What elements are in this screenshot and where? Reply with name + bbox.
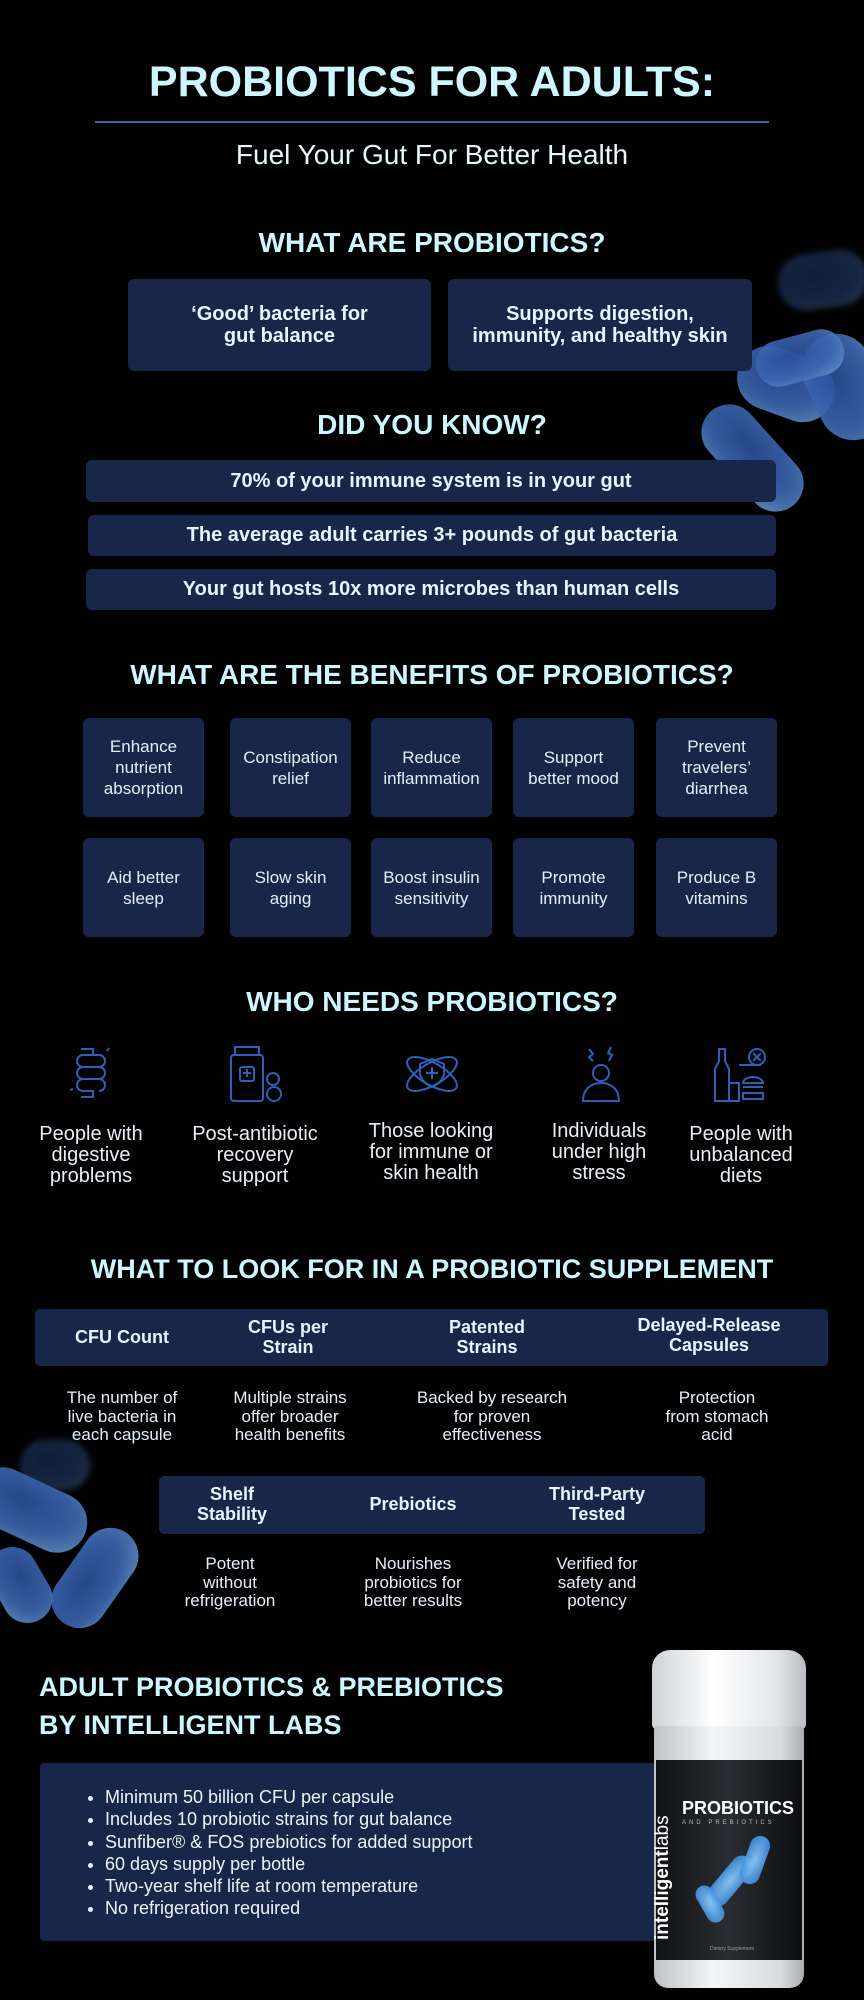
panel: benefits grid: sensitivity — [395, 888, 468, 908]
panel: definition boxes — [128, 279, 752, 371]
fact 3 — [86, 569, 776, 610]
panel: criteria row 1: Protection — [679, 1388, 755, 1407]
subtitle: Fuel Your Gut For Better Health — [236, 139, 628, 170]
panel: criteria row 1: Patented — [449, 1317, 525, 1337]
panel: benefits grid: Support — [544, 748, 603, 766]
panel: criteria row 2: Nourishes — [375, 1554, 451, 1573]
panel: benefits grid: Enhance — [110, 737, 177, 756]
icon: immune shield atom — [406, 1056, 458, 1092]
panel: benefits grid: vitamins — [685, 888, 748, 908]
panel: benefits grid: nutrient — [115, 758, 172, 777]
panel: who needs icons: unbalanced — [689, 1144, 793, 1166]
panel: criteria row 1: offer broader — [241, 1406, 339, 1426]
panel: benefits grid: better mood — [528, 768, 619, 788]
panel: benefits grid: travelers’ — [682, 758, 751, 777]
fact 1: 70% of your immune system is in your gut — [230, 470, 632, 492]
panel: product features: No refrigeration required — [105, 1898, 300, 1918]
panel: product features: Sunfiber® & FOS prebiotics for added support — [105, 1832, 472, 1852]
panel: criteria row 2: Third-Party — [549, 1484, 645, 1504]
panel: who needs icons: Those looking — [369, 1120, 493, 1142]
product bottle: Dietary Supplement — [710, 1946, 754, 1952]
text: digestive: problems — [50, 1165, 132, 1187]
panel: who needs icons: for immune or — [369, 1141, 493, 1163]
icon: intestine — [70, 1048, 110, 1098]
text: digestive: digestive — [52, 1144, 130, 1166]
panel: criteria row 2: Shelf — [210, 1484, 254, 1504]
panel: who needs icons: recovery — [217, 1144, 293, 1166]
fact 3: Your gut hosts 10x more microbes than human cells — [183, 578, 679, 600]
panel: criteria row 2: potency — [567, 1591, 627, 1610]
panel: criteria row 2: better results — [364, 1591, 462, 1610]
product bottle — [652, 1650, 806, 1988]
panel: product features: Two-year shelf life at room temperature — [105, 1876, 418, 1896]
panel: who needs icons: diets — [720, 1165, 762, 1187]
panel: who needs icons: stress — [572, 1162, 626, 1184]
panel: criteria row 2: refrigeration — [185, 1591, 275, 1610]
panel: benefits grid: Produce B — [677, 868, 756, 886]
panel: criteria row 1: from stomach — [666, 1406, 768, 1426]
panel: criteria row 2: Verified for — [556, 1554, 638, 1573]
text: digestive — [39, 1123, 143, 1187]
panel: criteria row 2: safety and — [558, 1572, 636, 1592]
panel: product features: Includes 10 probiotic strains for gut balance — [105, 1809, 452, 1829]
heading: did you know: DID YOU KNOW? — [317, 409, 547, 440]
box: supports: Supports digestion, — [506, 303, 694, 325]
panel: benefits grid: diarrhea — [685, 779, 748, 798]
title: PROBIOTICS FOR ADULTS: — [149, 58, 715, 106]
panel: benefits grid: absorption — [104, 779, 183, 798]
panel: benefits grid: aging — [270, 888, 311, 908]
heading: product: ADULT PROBIOTICS & PREBIOTICS — [39, 1672, 504, 1702]
panel: benefits grid: immunity — [539, 888, 608, 908]
panel: who needs icons: Individuals — [552, 1120, 646, 1142]
panel: criteria row 1: Strain — [262, 1337, 314, 1357]
panel: criteria row 1: CFUs per — [248, 1317, 328, 1337]
panel: benefits grid: Prevent — [687, 737, 746, 756]
panel: benefits grid: Boost insulin — [383, 868, 480, 886]
panel: criteria row 1: The number of — [67, 1388, 177, 1407]
panel: criteria row 1: Strains — [456, 1337, 518, 1357]
box: supports — [448, 279, 752, 371]
product bottle: AND PREBIOTICS — [682, 1820, 775, 1826]
panel: product features: 60 days supply per bottle — [105, 1854, 305, 1874]
panel: criteria row 2 — [159, 1476, 705, 1610]
heading: what to look for: WHAT TO LOOK FOR IN A PROBIOTIC SUPPLEMENT — [91, 1254, 773, 1284]
heading: who needs: WHO NEEDS PROBIOTICS? — [246, 986, 618, 1017]
panel: benefits grid: Constipation — [243, 748, 338, 766]
panel: criteria row 2: Tested — [569, 1504, 625, 1524]
panel: benefits grid: relief — [272, 768, 309, 788]
decoration: bacteria bottom left — [0, 1437, 138, 1628]
decoration: bacteria top right — [701, 246, 864, 512]
text: digestive: People with — [39, 1123, 143, 1145]
box: good bacteria — [128, 279, 431, 371]
panel: benefits grid: Slow skin — [255, 868, 326, 886]
panel: who needs icons: support — [222, 1165, 288, 1187]
heading: benefits: WHAT ARE THE BENEFITS OF PROBIOTICS? — [130, 659, 734, 690]
panel: criteria row 1: Multiple strains — [233, 1388, 347, 1407]
panel: criteria row 2: probiotics for — [364, 1572, 462, 1592]
fact 2: The average adult carries 3+ pounds of gut bacteria — [187, 524, 677, 546]
panel: who needs icons: People with — [689, 1123, 793, 1145]
panel: criteria row 2: Stability — [197, 1504, 267, 1524]
panel: criteria row 1: acid — [701, 1425, 733, 1444]
panel: facts — [86, 460, 776, 610]
panel: product features: Minimum 50 billion CFU per capsule — [105, 1787, 394, 1807]
panel: who needs icons: skin health — [383, 1162, 479, 1184]
heading: product: BY INTELLIGENT LABS — [39, 1710, 342, 1740]
panel: benefits grid: Promote — [541, 868, 606, 886]
panel: criteria row 1: Capsules — [669, 1335, 749, 1355]
panel: product features — [40, 1763, 656, 1941]
panel: benefits grid: inflammation — [383, 768, 480, 788]
panel: criteria row 1: for proven — [454, 1406, 530, 1426]
panel: criteria row 2: without — [203, 1572, 257, 1592]
icon: unbalanced diet — [714, 1048, 766, 1102]
box: good bacteria: ‘Good’ bacteria for — [191, 303, 368, 325]
panel: benefits grid: sleep — [123, 888, 164, 908]
panel: criteria row 2: Prebiotics — [369, 1494, 457, 1514]
fact 2 — [88, 515, 776, 556]
heading: product — [39, 1672, 504, 1740]
icon: pill bottle — [230, 1046, 282, 1102]
product bottle: PROBIOTICS — [682, 1798, 794, 1818]
box: good bacteria: gut balance — [224, 325, 335, 347]
panel: criteria row 1: each capsule — [72, 1425, 172, 1444]
panel: criteria row 1 — [35, 1309, 828, 1444]
heading: what are probiotics: WHAT ARE PROBIOTICS? — [259, 227, 605, 258]
panel: benefits grid — [83, 718, 777, 937]
panel: criteria row 2: Potent — [205, 1554, 255, 1573]
fact 1 — [86, 460, 776, 502]
panel: benefits grid: Aid better — [107, 868, 180, 886]
box: supports: immunity, and healthy skin — [472, 325, 728, 347]
panel: criteria row 1: live bacteria in — [68, 1406, 176, 1426]
panel: criteria row 1: health benefits — [235, 1425, 345, 1444]
panel: benefits grid: Reduce — [402, 748, 461, 766]
panel: who needs icons: Post-antibiotic — [192, 1123, 318, 1145]
panel: criteria row 1: Delayed-Release — [637, 1315, 781, 1335]
icon: stressed person — [582, 1046, 620, 1102]
panel: criteria row 1: CFU Count — [75, 1327, 169, 1347]
panel: who needs icons: under high — [552, 1141, 646, 1163]
panel: criteria row 1: Backed by research — [417, 1388, 567, 1407]
panel: who needs icons — [39, 1046, 793, 1187]
product bottle: intelligentlabs — [652, 1815, 673, 1940]
panel: criteria row 1: effectiveness — [443, 1425, 541, 1444]
